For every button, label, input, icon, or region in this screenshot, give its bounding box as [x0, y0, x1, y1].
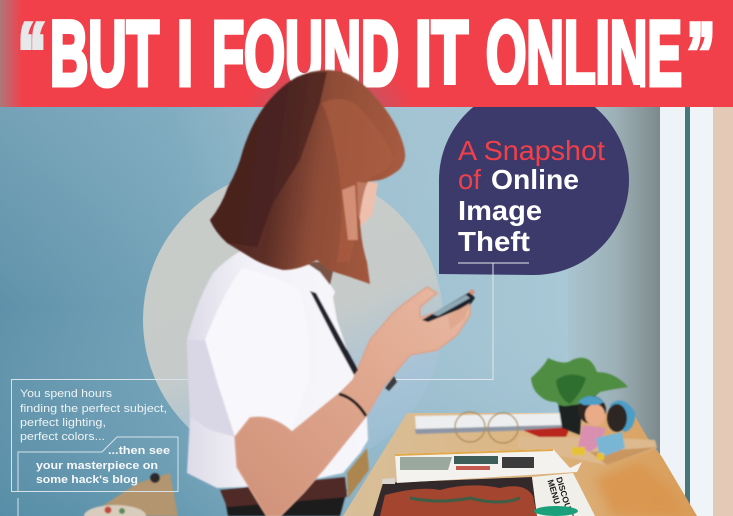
wooden table: [343, 413, 697, 516]
face sliver: [345, 180, 378, 240]
story punchline: your masterpiece on: [36, 460, 158, 472]
closing quote: ”: [687, 6, 715, 100]
white menu cover: [532, 473, 595, 516]
story punchline: [36, 445, 170, 486]
glasses: [455, 412, 485, 442]
callout heading: [458, 135, 605, 257]
smartphone: [422, 292, 475, 322]
word: but: BUT: [50, 3, 159, 105]
lanyard: [310, 291, 358, 375]
chair and pillow: [84, 473, 178, 516]
arm and hand: [235, 287, 470, 516]
story punchline: ...then see: [108, 445, 170, 457]
wooden block: [518, 437, 657, 465]
callout heading: Theft: [458, 226, 530, 257]
open magazine and discount menu: [373, 449, 595, 516]
plant: [531, 358, 628, 406]
floral pillow: [84, 505, 146, 516]
boy doll: [572, 396, 606, 455]
sleeve: [205, 268, 310, 437]
story text lines: perfect colors...: [20, 431, 105, 443]
top magazine: [382, 478, 395, 484]
callout heading: A Snapshot: [458, 135, 605, 166]
story text lines: [20, 388, 167, 443]
connector line from callout: [396, 263, 493, 380]
girl doll: [596, 400, 635, 460]
callout heading: of: [458, 164, 481, 195]
woman's hair over the title: [210, 70, 405, 284]
red phone: [523, 427, 570, 438]
story punchline: some hack's blog: [36, 474, 138, 486]
title: [18, 3, 715, 105]
bracelet: [339, 394, 366, 416]
lower book: [373, 477, 537, 516]
black trousers: [225, 490, 347, 516]
story text lines: perfect lighting,: [20, 417, 106, 429]
callout heading: Image: [458, 195, 542, 226]
menu cover title: MENU: [545, 478, 562, 505]
story text lines: You spend hours: [20, 388, 112, 400]
opening quote: “: [18, 6, 46, 100]
decorative circle behind the woman: [143, 170, 443, 470]
word: I: I: [177, 3, 193, 105]
tan backrest: [347, 448, 369, 498]
papers: [415, 413, 564, 432]
story text lines: finding the perfect subject,: [20, 403, 167, 415]
wristwatch: [385, 376, 397, 391]
header red banner: [0, 0, 733, 107]
plant pot: [558, 402, 582, 435]
callout heading: Online: [491, 164, 579, 195]
white shirt: [187, 250, 368, 488]
brown belt: [220, 477, 347, 507]
word: found: FOUND: [212, 3, 399, 105]
story text box: [12, 380, 188, 516]
neck shadow under hair: [305, 262, 335, 285]
woman looking at her phone: [187, 250, 475, 516]
navy callout blob: [430, 85, 640, 275]
word: it: IT: [415, 3, 468, 105]
desk items: papers, glasses, plant and dolls: [415, 358, 657, 465]
